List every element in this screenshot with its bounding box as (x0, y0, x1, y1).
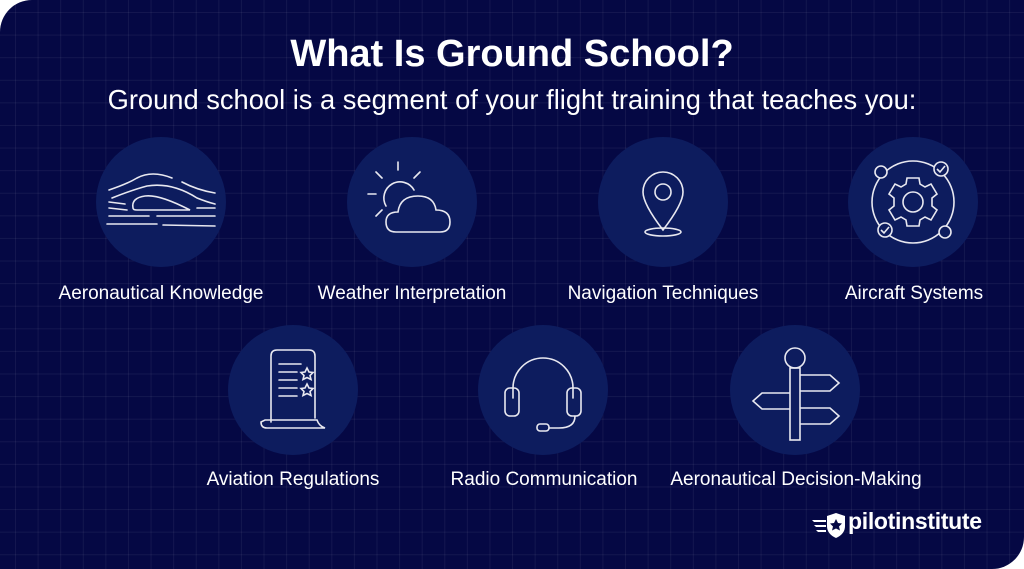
label: radio: Radio Communication (451, 469, 637, 490)
icon: aeronautical knowledge (96, 137, 226, 267)
subtitle: Ground school is a segment of your flight training that teaches you: (108, 84, 916, 115)
label: decision making: Aeronautical Decision-Making (670, 469, 922, 490)
icon: radio headset (478, 325, 608, 455)
label: weather: Weather Interpretation (318, 283, 506, 304)
label: navigation: Navigation Techniques (568, 283, 758, 304)
icon: weather (347, 137, 477, 267)
icon: regulations (228, 325, 358, 455)
label: aeronautical knowledge: Aeronautical Knowledge (59, 283, 263, 304)
logo: pilotinstitute: pilotinstitute (848, 508, 982, 534)
icon: navigation (598, 137, 728, 267)
title: What Is Ground School? (290, 33, 734, 75)
label: regulations: Aviation Regulations (207, 469, 379, 490)
icon: aircraft systems (848, 137, 978, 267)
label: aircraft systems: Aircraft Systems (845, 283, 983, 304)
icon: signpost (730, 325, 860, 455)
logo: pilotinstitute (812, 508, 982, 538)
